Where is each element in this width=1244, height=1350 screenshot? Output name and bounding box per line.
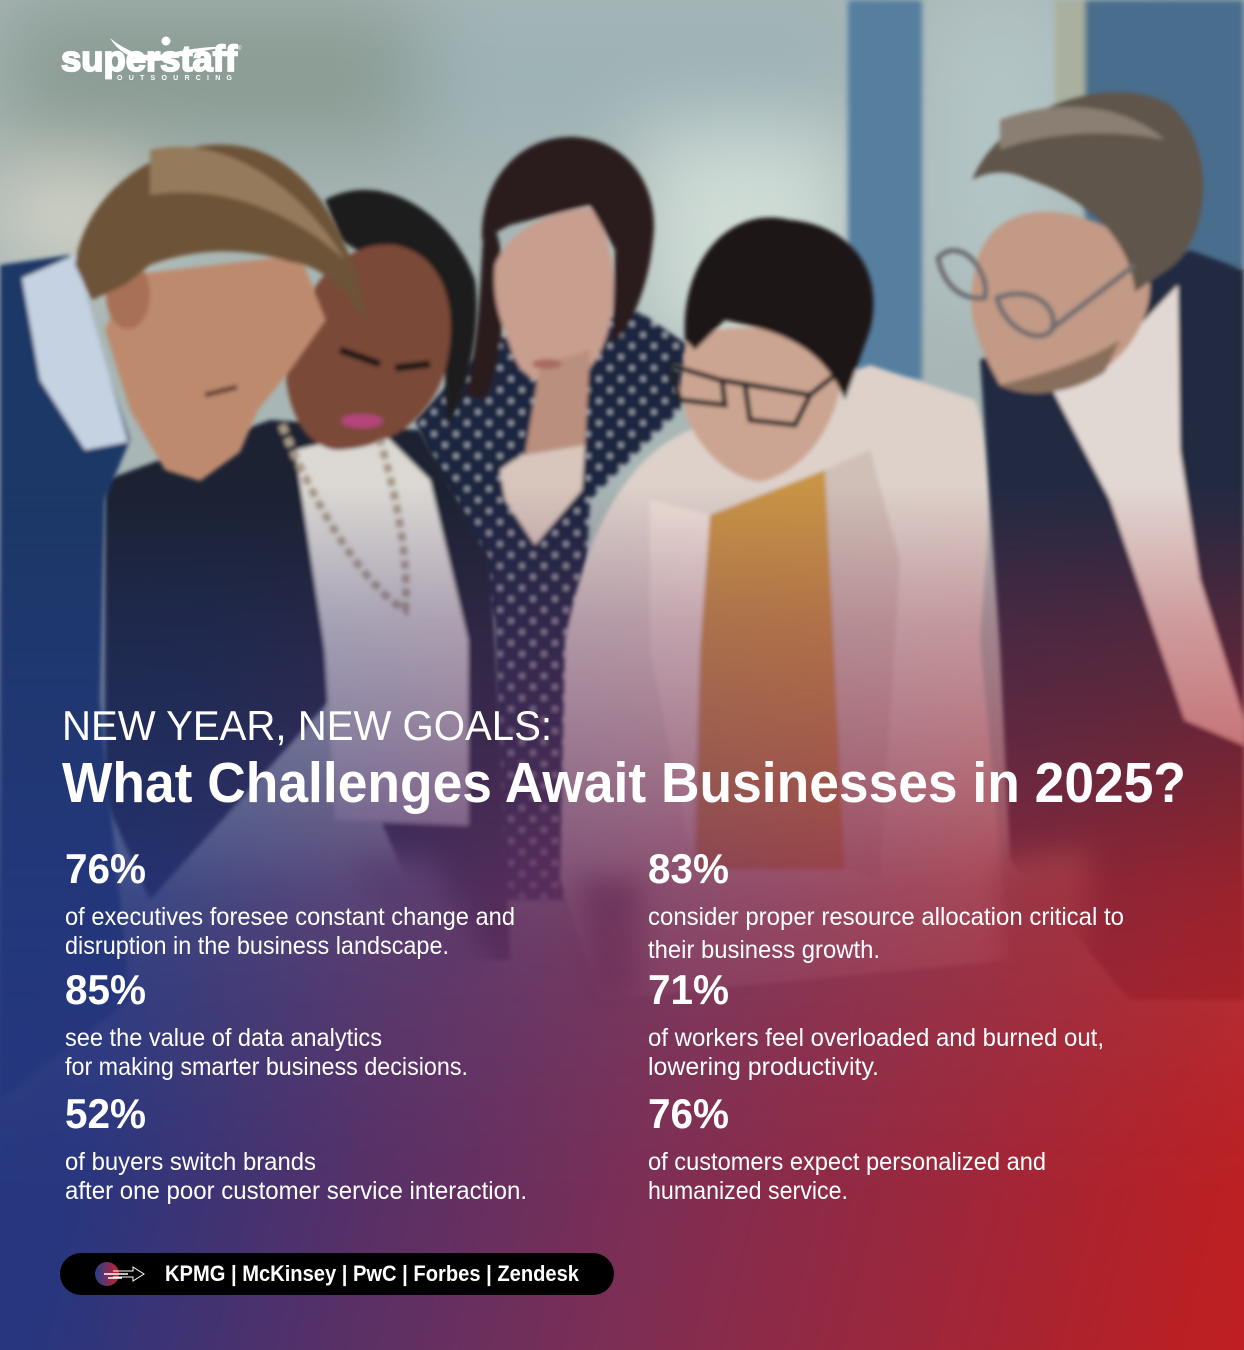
stat: 83% resource allocation: their business growth. (648, 936, 880, 964)
logo: superstaff outsourcing: ® (237, 45, 242, 52)
stat: 83% resource allocation: 83% (648, 845, 729, 892)
stat: 76% executives: of executives foresee constant change and (65, 903, 515, 931)
sources pill (60, 1253, 614, 1295)
person: woman in cream blazer (560, 218, 1010, 1000)
stat: 52% buyers (65, 1090, 527, 1205)
person: man with glasses (938, 92, 1244, 1000)
blue to red gradient overlay (0, 504, 1244, 1350)
logo: superstaff outsourcing: superstaff (61, 38, 238, 79)
person: woman in polka dots (415, 137, 695, 900)
stat: 76% customers: humanized service. (648, 1177, 848, 1205)
stat: 71% workers: 71% (648, 966, 729, 1013)
window pillars (848, 0, 1244, 380)
person: man in navy sweater (0, 145, 367, 1100)
stat: 85% data analytics (65, 966, 468, 1081)
title block: What Challenges Await Businesses in 2025? (62, 751, 1186, 815)
stat: 71% workers: of workers feel overloaded and burned out, (648, 1024, 1104, 1052)
stat: 52% buyers: 52% (65, 1090, 146, 1137)
stat: 76% customers: of customers expect personalized and (648, 1148, 1046, 1176)
stat: 85% data analytics: for making smarter business decisions. (65, 1053, 468, 1081)
stat: 76% executives (65, 845, 515, 960)
stat: 71% workers: lowering productivity. (648, 1053, 879, 1081)
stat: 52% buyers: of buyers switch brands (65, 1148, 316, 1176)
stat: 83% resource allocation (648, 845, 1124, 964)
lower table and hands (350, 850, 1090, 1010)
stat: 85% data analytics: 85% (65, 966, 146, 1013)
sources pill: KPMG | McKinsey | PwC | Forbes | Zendesk (165, 1261, 580, 1286)
stat: 83% resource allocation: consider proper resource allocation critical to (648, 903, 1124, 931)
stat: 71% workers (648, 966, 1104, 1081)
person: woman with necklace (105, 190, 510, 960)
logo: superstaff outsourcing: OUTSOURCING (117, 75, 233, 82)
title block (62, 702, 1186, 815)
stat: 85% data analytics: see the value of data analytics (65, 1024, 382, 1052)
title block: NEW YEAR, NEW GOALS: (62, 702, 552, 749)
stat: 52% buyers: after one poor customer service interaction. (65, 1177, 527, 1205)
stat: 76% customers (648, 1090, 1046, 1205)
icon: source arrow (95, 1262, 144, 1286)
stat: 76% executives: disruption in the business landscape. (65, 932, 449, 960)
stat: 76% customers: 76% (648, 1090, 729, 1137)
stat: 76% executives: 76% (65, 845, 146, 892)
